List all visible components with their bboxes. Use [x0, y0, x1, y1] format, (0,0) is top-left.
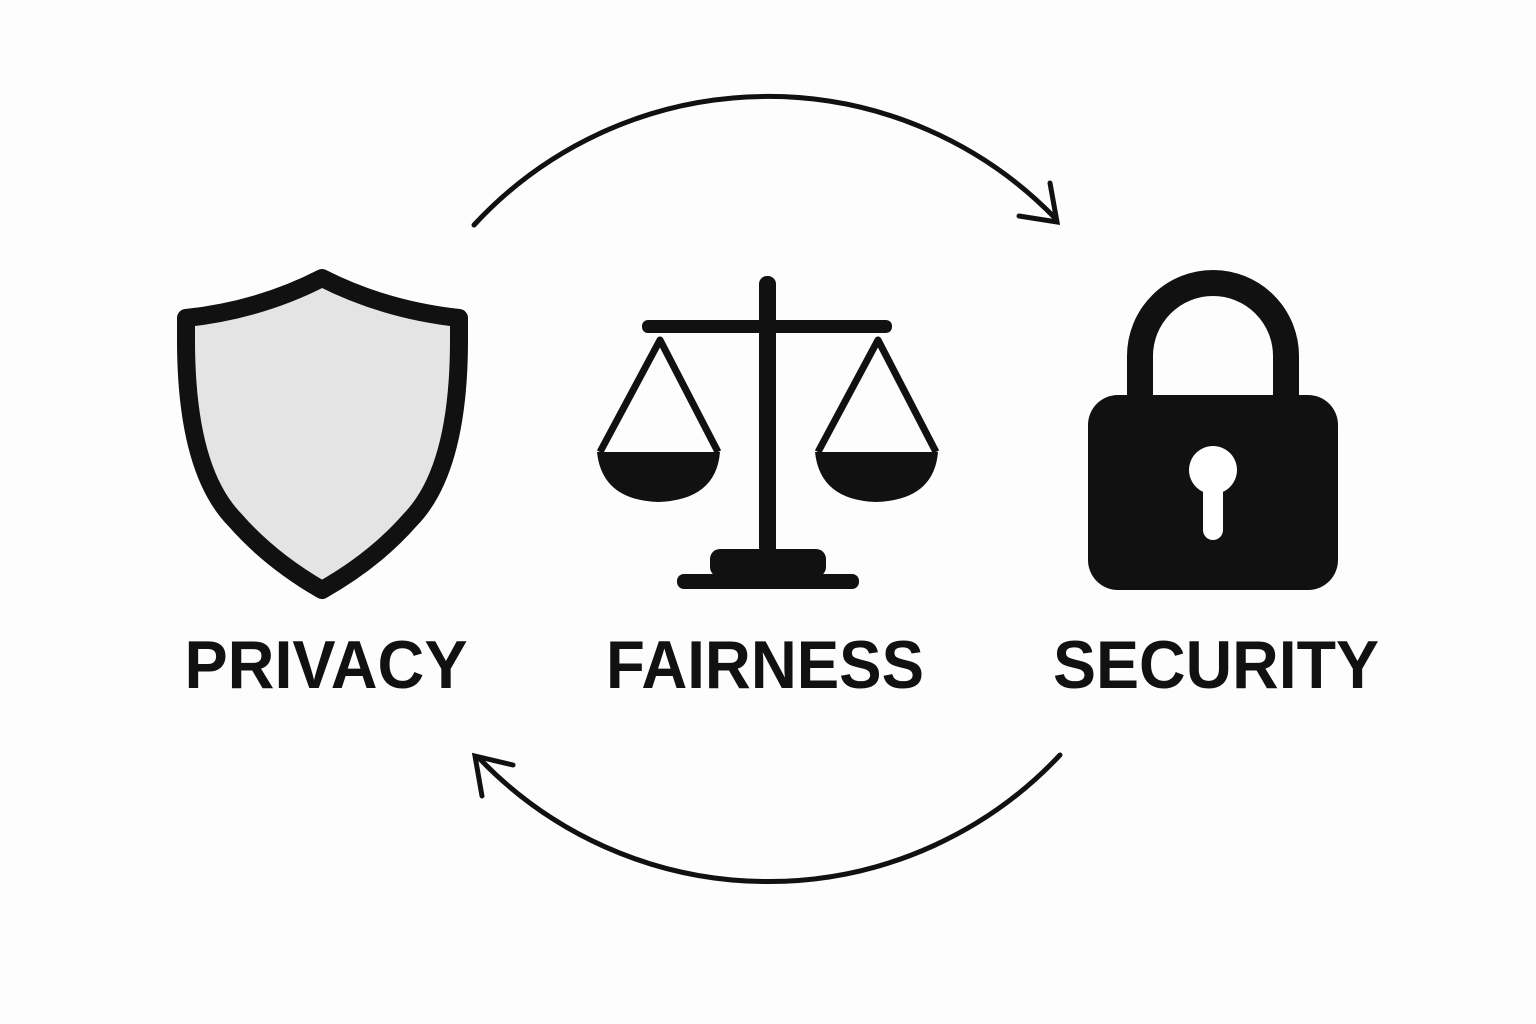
label: FAIRNESS: FAIRNESS	[606, 627, 924, 703]
icon: shield	[186, 278, 459, 590]
label: SECURITY: SECURITY	[1053, 627, 1379, 703]
arrow: bottom cycle arc	[475, 755, 1060, 882]
icon: padlock	[1088, 283, 1338, 590]
label: PRIVACY: PRIVACY	[184, 627, 468, 703]
arrow: top cycle arc	[474, 96, 1057, 225]
icon: scales of justice	[597, 276, 938, 589]
